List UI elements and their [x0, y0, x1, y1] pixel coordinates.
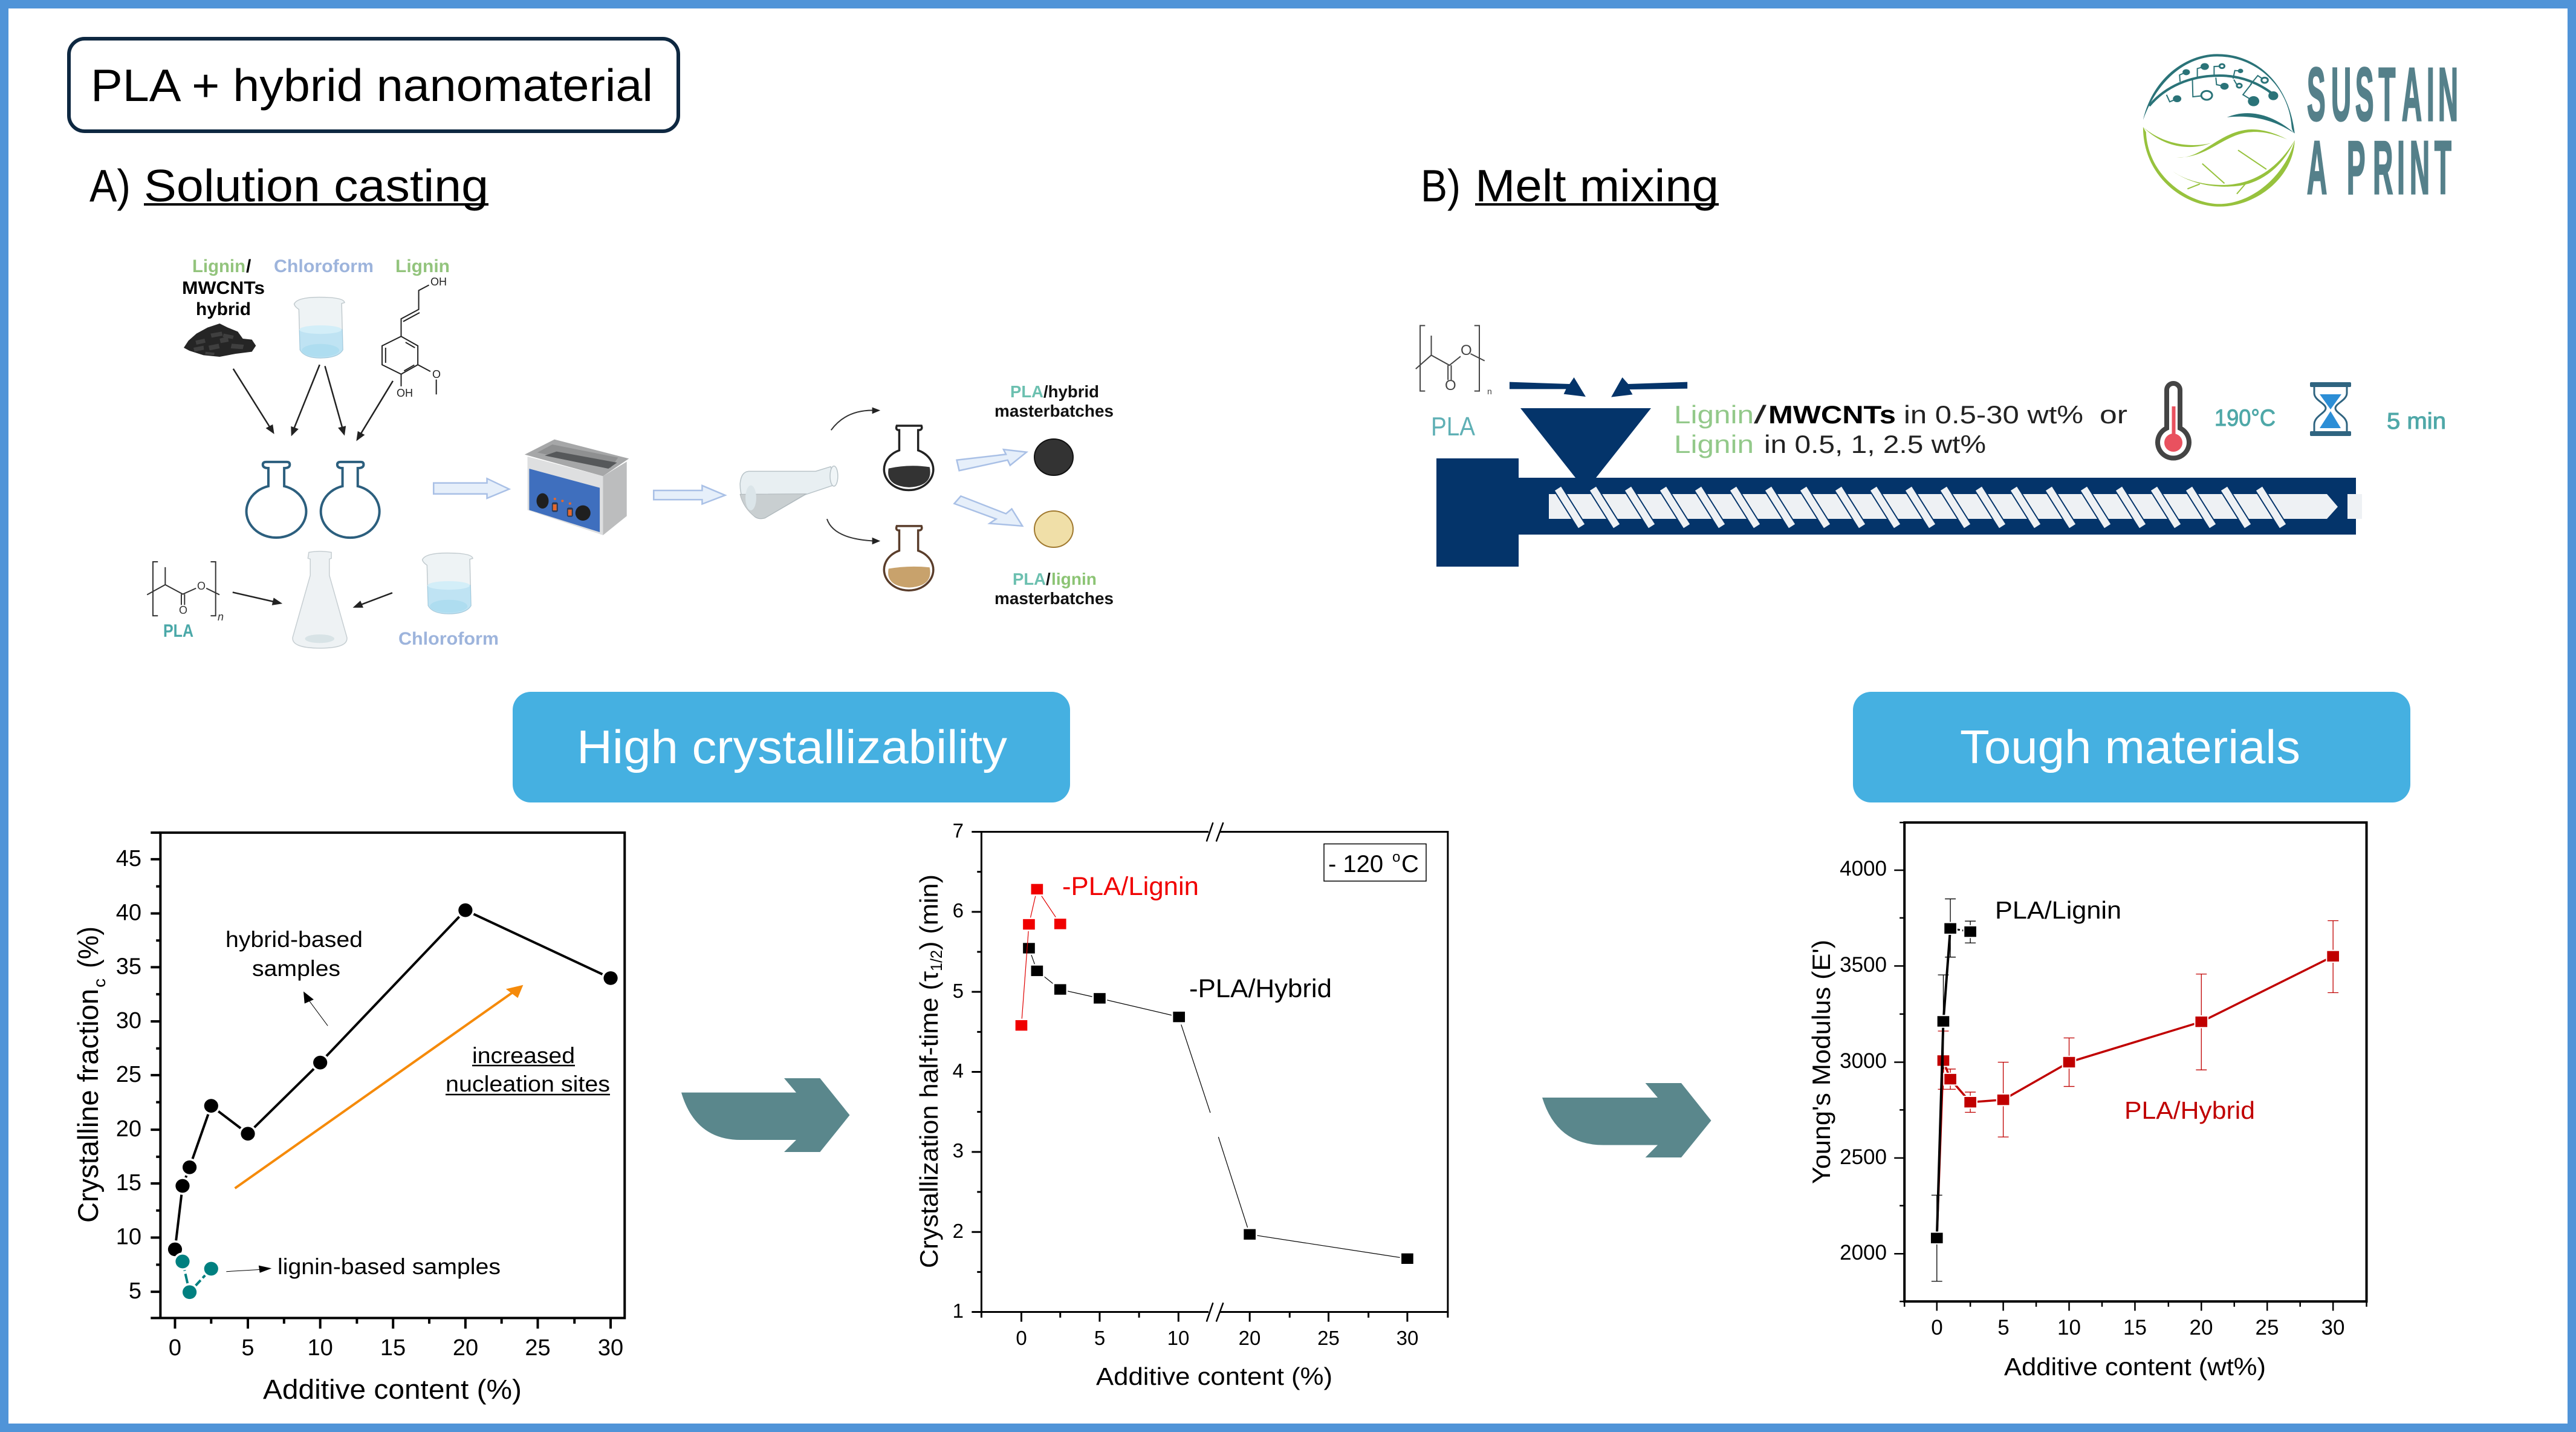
label: Lignin/MWCNTs hybrid: hybrid — [196, 299, 251, 319]
y axis tick labels: 6 — [953, 899, 964, 922]
label: PLA/hybrid masterbatches: masterbatches — [994, 402, 1114, 420]
label: additive concentrations: in 0.5-30 wt% — [1904, 400, 2083, 429]
icon: ultrasonic bath — [525, 440, 629, 535]
y axis tick labels: 4000 — [1840, 857, 1887, 880]
icon: PLA molecule: O — [1461, 342, 1472, 359]
arrow: to lignin-based label — [226, 1266, 271, 1273]
series: PLA/Hybrid — [1937, 921, 2339, 1238]
x axis tick labels: 0 — [1016, 1327, 1027, 1349]
y axis tick labels: 2500 — [1840, 1145, 1887, 1169]
label: additive concentrations: in 0.5, 1, 2.5 wt% — [1764, 430, 1986, 458]
x axis tick labels: 25 — [1317, 1327, 1340, 1349]
x axis tick labels: 10 — [2057, 1316, 2081, 1339]
label: Chloroform bottom: Chloroform — [398, 629, 499, 649]
arrow: to sonicator — [433, 478, 509, 498]
arrow: half-time to modulus — [1542, 1083, 1711, 1157]
chart: crystallization half-time — [915, 819, 1448, 1390]
y axis tick labels: 7 — [953, 819, 964, 842]
label: Lignin top: Lignin — [395, 256, 450, 276]
legend: temperature: - 120 — [1328, 851, 1383, 877]
y axis title: (%) — [72, 926, 104, 968]
x axis tick labels — [169, 1335, 623, 1361]
y axis title — [72, 926, 109, 1223]
y axis title — [915, 874, 946, 1268]
x axis title: Additive content (%) — [263, 1374, 522, 1405]
y axis title: ) (min) — [915, 874, 943, 950]
panel: solution casting diagram — [147, 256, 1114, 649]
series: PLA/Hybrid — [1023, 943, 1413, 1264]
icon: black hybrid masterbatch — [1034, 439, 1073, 475]
title — [69, 39, 678, 131]
label: Lignin/MWCNTs hybrid: MWCNTs — [182, 278, 265, 298]
x axis tick labels: 5 — [1094, 1327, 1105, 1349]
series: lignin-based samples — [175, 1255, 218, 1299]
x axis tick labels: 20 — [1239, 1327, 1260, 1349]
label: PLA/hybrid masterbatches: PLA — [1010, 382, 1043, 401]
heading: A) Solution casting: A) — [89, 160, 131, 211]
arrows: curved split — [827, 407, 880, 544]
label: additive concentrations: Lignin — [1674, 400, 1754, 429]
y axis tick labels: 35 — [116, 954, 141, 980]
label: PLA/hybrid masterbatches — [994, 382, 1114, 420]
label: additive concentrations: MWCNTs — [1768, 400, 1896, 429]
x axis tick labels: 15 — [2123, 1316, 2147, 1339]
y axis tick labels: 15 — [116, 1170, 141, 1196]
button: High crystallizability: High crystallizability — [577, 720, 1007, 773]
label: mixing time: 5 min — [2387, 409, 2446, 434]
logo: Sustain a Print: A PRINT — [2307, 125, 2451, 210]
annotation: hybrid-based samples: hybrid-based — [225, 927, 363, 952]
label: PLA/lignin masterbatches — [994, 570, 1114, 608]
y axis tick labels: 30 — [116, 1008, 141, 1033]
x axis tick labels: 25 — [2256, 1316, 2279, 1339]
x axis tick labels: 0 — [1931, 1316, 1943, 1339]
y axis tick labels: 10 — [116, 1224, 141, 1249]
icon: tilted flask — [740, 466, 838, 519]
icon: coniferyl alcohol molecule: OH — [397, 387, 413, 399]
y axis tick labels: 3500 — [1840, 953, 1887, 977]
label: Lignin/MWCNTs hybrid: Lignin — [192, 256, 245, 276]
y axis tick labels: 1 — [953, 1300, 964, 1322]
chart: Young's modulus — [1807, 822, 2367, 1381]
x axis tick labels — [1016, 1327, 1418, 1349]
y axis tick labels: 3000 — [1840, 1049, 1887, 1073]
series: PLA/Lignin — [1016, 884, 1066, 1030]
icon: two round-bottom flasks — [247, 462, 380, 538]
label: Lignin/MWCNTs hybrid — [182, 256, 265, 319]
extruder: hopper and barrel — [1436, 408, 2356, 567]
logo: Sustain a Print — [2143, 52, 2458, 210]
logo: Sustain a Print: SUSTAIN — [2307, 52, 2458, 137]
y axis title: Crystalline fraction — [72, 989, 104, 1223]
x axis tick labels: 20 — [2190, 1316, 2213, 1339]
arrow: to flask — [654, 486, 725, 504]
y axis tick labels: 25 — [116, 1062, 141, 1087]
icon: beaker with chloroform — [294, 298, 345, 358]
y axis tick labels: 40 — [116, 900, 141, 925]
icon: coniferyl alcohol molecule: O — [432, 368, 441, 380]
heading: B) Melt mixing: Melt mixing — [1475, 160, 1719, 211]
legend: temperature: o — [1392, 849, 1400, 865]
axis breaks — [1207, 822, 1223, 1322]
y axis tick labels: 2000 — [1840, 1241, 1887, 1264]
extruder: screw — [1549, 489, 2362, 526]
series: hybrid-based samples — [168, 903, 618, 1256]
y axis tick labels: 2 — [953, 1220, 964, 1242]
x axis tick labels — [1931, 1316, 2344, 1339]
panel: melt mixing diagram — [1416, 325, 2446, 567]
x axis tick labels: 30 — [2321, 1316, 2344, 1339]
title: PLA + hybrid nanomaterial — [91, 60, 653, 111]
y axis tick labels: 20 — [116, 1116, 141, 1142]
legend: temperature: C — [1401, 851, 1419, 877]
annotation: PLA/Hybrid: PLA/Hybrid — [2124, 1096, 2255, 1124]
label: PLA/hybrid masterbatches: /hybrid — [1043, 382, 1099, 401]
label: Chloroform top: Chloroform — [274, 256, 374, 276]
y axis tick labels — [953, 819, 964, 1322]
chart: crystalline fraction — [72, 833, 625, 1405]
annotation: PLA/Lignin: -PLA/Lignin — [1062, 872, 1199, 901]
x axis tick labels: 30 — [598, 1335, 623, 1361]
y axis tick labels — [1840, 857, 1887, 1264]
icon: coniferyl alcohol molecule — [382, 276, 447, 399]
icon: coniferyl alcohol molecule: OH — [430, 276, 447, 288]
y axis tick labels: 4 — [953, 1059, 964, 1082]
arrow: increased nucleation sites — [235, 985, 523, 1188]
icon: PLA molecule — [1416, 325, 1492, 396]
y axis tick labels: 3 — [953, 1139, 964, 1162]
x axis tick labels: 25 — [525, 1335, 551, 1361]
icon: PLA molecule: O — [1445, 377, 1456, 394]
annotation: increased nucleation sites: nucleation sites — [446, 1072, 610, 1096]
icon: flask with lignin solution — [884, 526, 933, 590]
heading: B) Melt mixing: B) — [1421, 160, 1461, 211]
annotation: increased nucleation sites: increased — [472, 1043, 575, 1068]
label: temperature: 190°C — [2214, 405, 2276, 431]
label: Lignin/MWCNTs hybrid: / — [246, 256, 251, 276]
y axis title: 1/2 — [927, 950, 946, 971]
y axis tick labels: 45 — [116, 846, 141, 871]
annotation: lignin-based samples: lignin-based samples — [277, 1254, 501, 1279]
label: PLA/lignin masterbatches: masterbatches — [994, 589, 1114, 608]
y axis title: Young's Modulus (E') — [1807, 940, 1835, 1184]
label: PLA/lignin masterbatches: lignin — [1051, 570, 1097, 588]
x axis tick labels: 10 — [1167, 1327, 1189, 1349]
annotation: hybrid-based samples: samples — [252, 956, 340, 981]
arrows: reagents into flasks — [233, 365, 393, 608]
annotation: hybrid-based samples — [225, 927, 363, 981]
label: PLA: PLA — [1431, 412, 1476, 441]
x axis title: Additive content (%) — [1096, 1362, 1332, 1390]
icon: flask with hybrid solution — [884, 426, 933, 490]
plot area: frame, ticks, series — [972, 822, 1448, 1322]
label: additive concentrations: Lignin — [1674, 430, 1754, 458]
label: PLA/lignin masterbatches: / — [1046, 570, 1051, 588]
icon: PLA molecule: n — [1487, 386, 1492, 396]
icon: PLA molecule: O — [179, 604, 187, 616]
icon: Erlenmeyer flask — [293, 552, 347, 648]
x axis tick labels: 0 — [169, 1335, 181, 1361]
plot area: frame, ticks, series — [151, 833, 625, 1329]
x axis tick labels: 30 — [1397, 1327, 1418, 1349]
label: PLA/lignin masterbatches: PLA — [1013, 570, 1046, 588]
x axis title: Additive content (wt%) — [2004, 1353, 2266, 1381]
label: additive concentrations: or — [2100, 400, 2127, 429]
x axis tick labels: 15 — [380, 1335, 406, 1361]
y axis tick labels — [116, 846, 141, 1304]
arrow: to lignin masterbatch — [954, 496, 1022, 526]
icon: cream lignin masterbatch — [1034, 511, 1073, 547]
icon: beaker with chloroform lower — [423, 553, 473, 614]
annotation: PLA/Lignin: PLA/Lignin — [1995, 896, 2121, 924]
arrows: feed into hopper — [1510, 377, 1687, 397]
annotation: PLA/Hybrid: -PLA/Hybrid — [1189, 974, 1332, 1003]
icon: hourglass — [2310, 382, 2351, 436]
y axis title: Crystallization half-time (τ — [915, 971, 943, 1268]
label: PLA: PLA — [163, 621, 193, 641]
y axis tick labels: 5 — [953, 980, 964, 1002]
legend: temperature — [1324, 844, 1426, 881]
y axis title: c — [90, 978, 109, 988]
x axis tick labels: 5 — [1997, 1316, 2010, 1339]
label: additive concentrations — [1674, 400, 2127, 458]
arrow: to hybrid masterbatch — [957, 449, 1027, 470]
plot area: frame, ticks, series — [1894, 822, 2367, 1311]
x axis tick labels: 5 — [241, 1335, 255, 1361]
label: additive concentrations: / — [1754, 400, 1767, 429]
arrow: to hybrid-based label — [303, 991, 328, 1026]
x axis tick labels: 20 — [453, 1335, 478, 1361]
button: Tough materials — [1853, 692, 2410, 802]
icon: black hybrid powder pile — [184, 324, 256, 357]
icon: PLA molecule — [147, 562, 224, 623]
x axis tick labels: 10 — [307, 1335, 333, 1361]
heading: A) Solution casting: Solution casting — [144, 160, 488, 211]
icon: thermometer — [2158, 383, 2189, 458]
icon: PLA molecule: O — [197, 580, 206, 592]
button: High crystallizability — [513, 692, 1070, 802]
annotation: increased nucleation sites — [446, 1043, 610, 1096]
icon: PLA molecule: n — [218, 611, 224, 623]
series: PLA/Lignin — [1931, 899, 1976, 1281]
button: Tough materials: Tough materials — [1960, 720, 2300, 773]
arrow: crystallinity to half-time — [681, 1078, 850, 1152]
y axis tick labels: 5 — [129, 1278, 141, 1304]
